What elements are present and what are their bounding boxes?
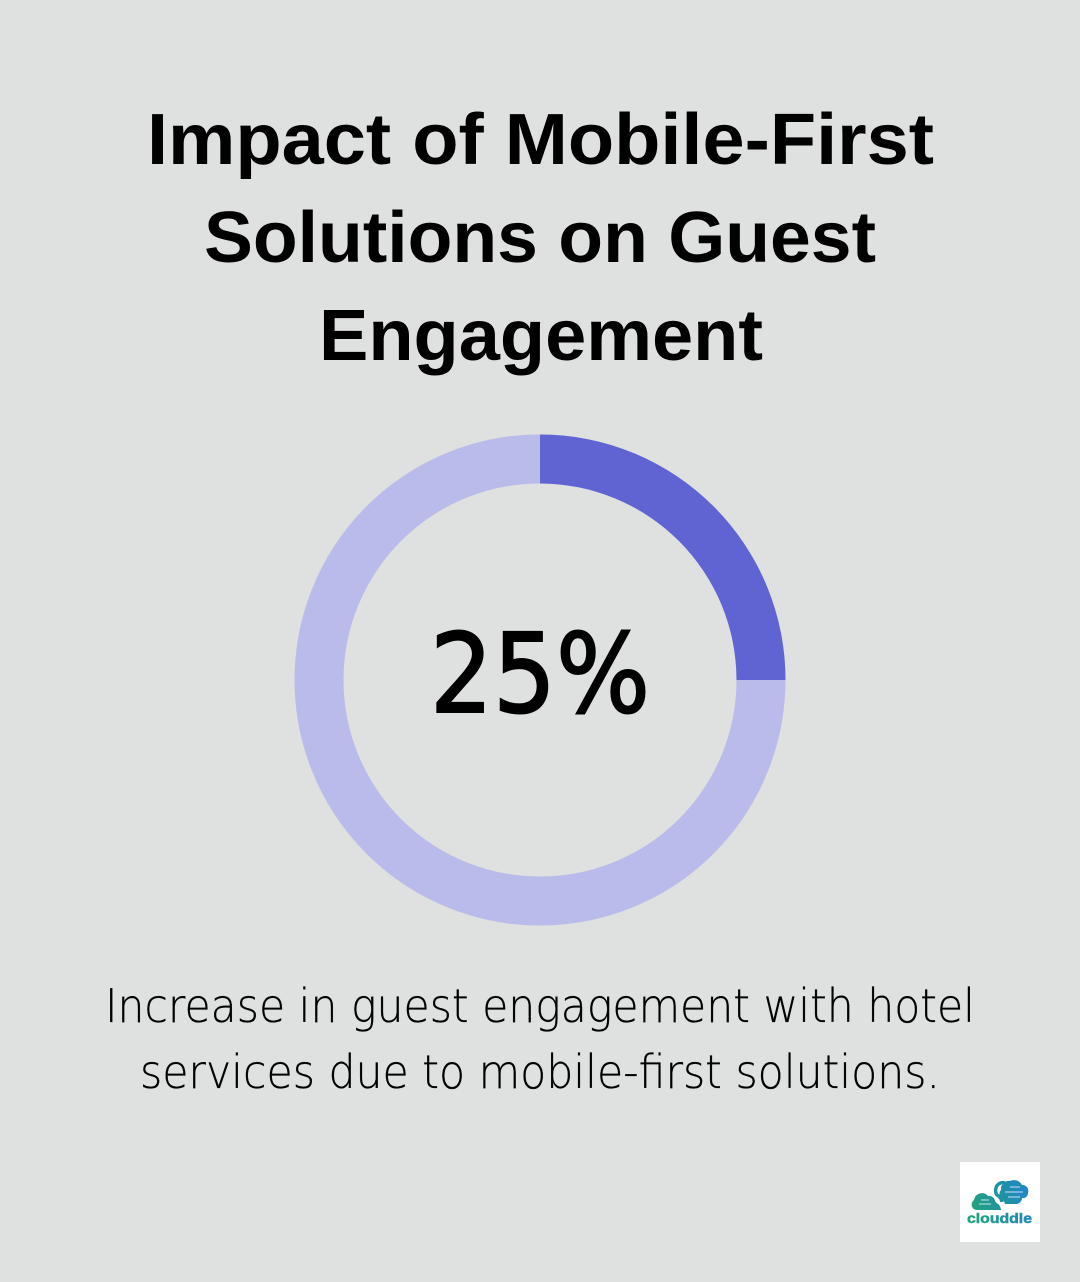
donut segment: 25% bbox=[540, 434, 786, 680]
donut chart bbox=[319, 434, 786, 901]
description text bbox=[105, 979, 975, 1099]
description text: services due to mobile-first solutions. bbox=[140, 1045, 940, 1099]
title: Engagement bbox=[319, 296, 763, 376]
logo: clouddle bbox=[960, 1162, 1040, 1242]
logo wordmark: clouddle bbox=[967, 1210, 1032, 1226]
icon: clouds bbox=[972, 1180, 1028, 1210]
title: Impact of Mobile-First bbox=[147, 100, 934, 180]
title bbox=[147, 100, 934, 376]
value: 25%: 25% bbox=[430, 610, 650, 738]
title: Solutions on Guest bbox=[204, 198, 876, 278]
description text: Increase in guest engagement with hotel bbox=[105, 979, 975, 1033]
donut track: remaining 75% bbox=[319, 459, 761, 901]
